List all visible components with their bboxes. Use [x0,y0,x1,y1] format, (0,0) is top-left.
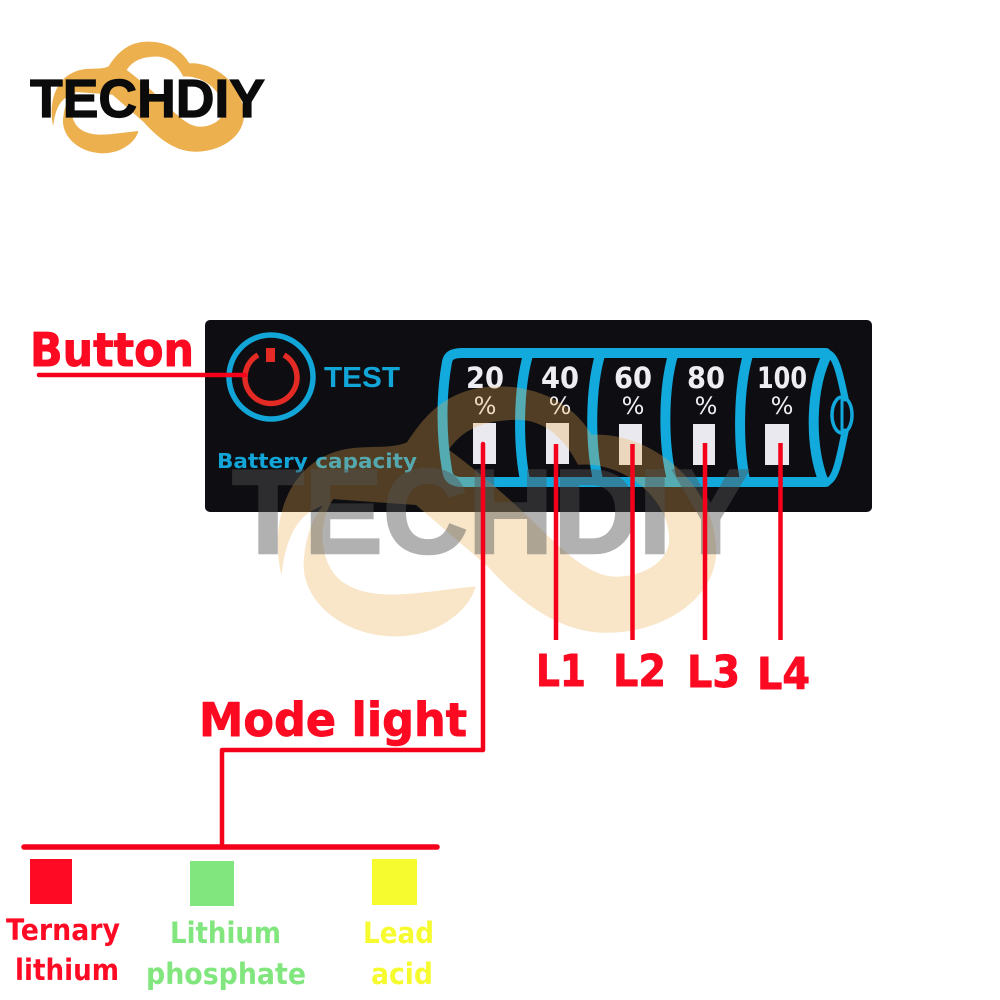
capacity labels: 20 [466,361,504,395]
LED windows [473,423,789,465]
label: Button: Button [30,323,194,377]
panel: battery indicator [205,320,872,512]
watermark text: TECHDIY [232,445,750,579]
capacity labels: 40 [541,361,579,395]
legend: lead acid: Lead [363,916,434,950]
capacity labels [466,361,807,420]
callout lines [24,375,780,847]
legend: ternary lithium: Ternary [6,913,120,947]
legend: lithium phosphate: phosphate [146,957,306,991]
label: L4: L4 [757,649,810,700]
capacity labels: % [695,392,717,420]
legend: lithium phosphate [146,861,306,991]
legend: ternary lithium [6,859,120,987]
legend: lead acid [363,859,434,991]
legend: ternary lithium: lithium [15,953,119,987]
logo: TECHDIY [30,42,265,153]
capacity labels: % [549,392,571,420]
label: Mode light: Mode light [199,693,467,747]
capacity labels: 80 [687,361,725,395]
label: L3: L3 [687,647,740,698]
label: TEST: TEST [324,362,400,394]
capacity labels: 100 [757,361,807,395]
logo: TECHDIY: TECHDIY [30,69,265,129]
capacity labels: % [474,392,496,420]
label: L2: L2 [613,646,666,697]
icon: battery outline [442,353,852,482]
legend: lead acid: acid [371,957,433,991]
label: Battery capacity: Battery capacity [217,449,417,473]
watermark: TECHDIY cloud [278,386,716,636]
capacity labels: % [622,392,644,420]
capacity labels: 60 [614,361,652,395]
capacity labels: % [771,392,793,420]
label: L1: L1 [536,646,586,697]
icon: power button [229,335,313,419]
legend: lithium phosphate: Lithium [170,916,281,950]
